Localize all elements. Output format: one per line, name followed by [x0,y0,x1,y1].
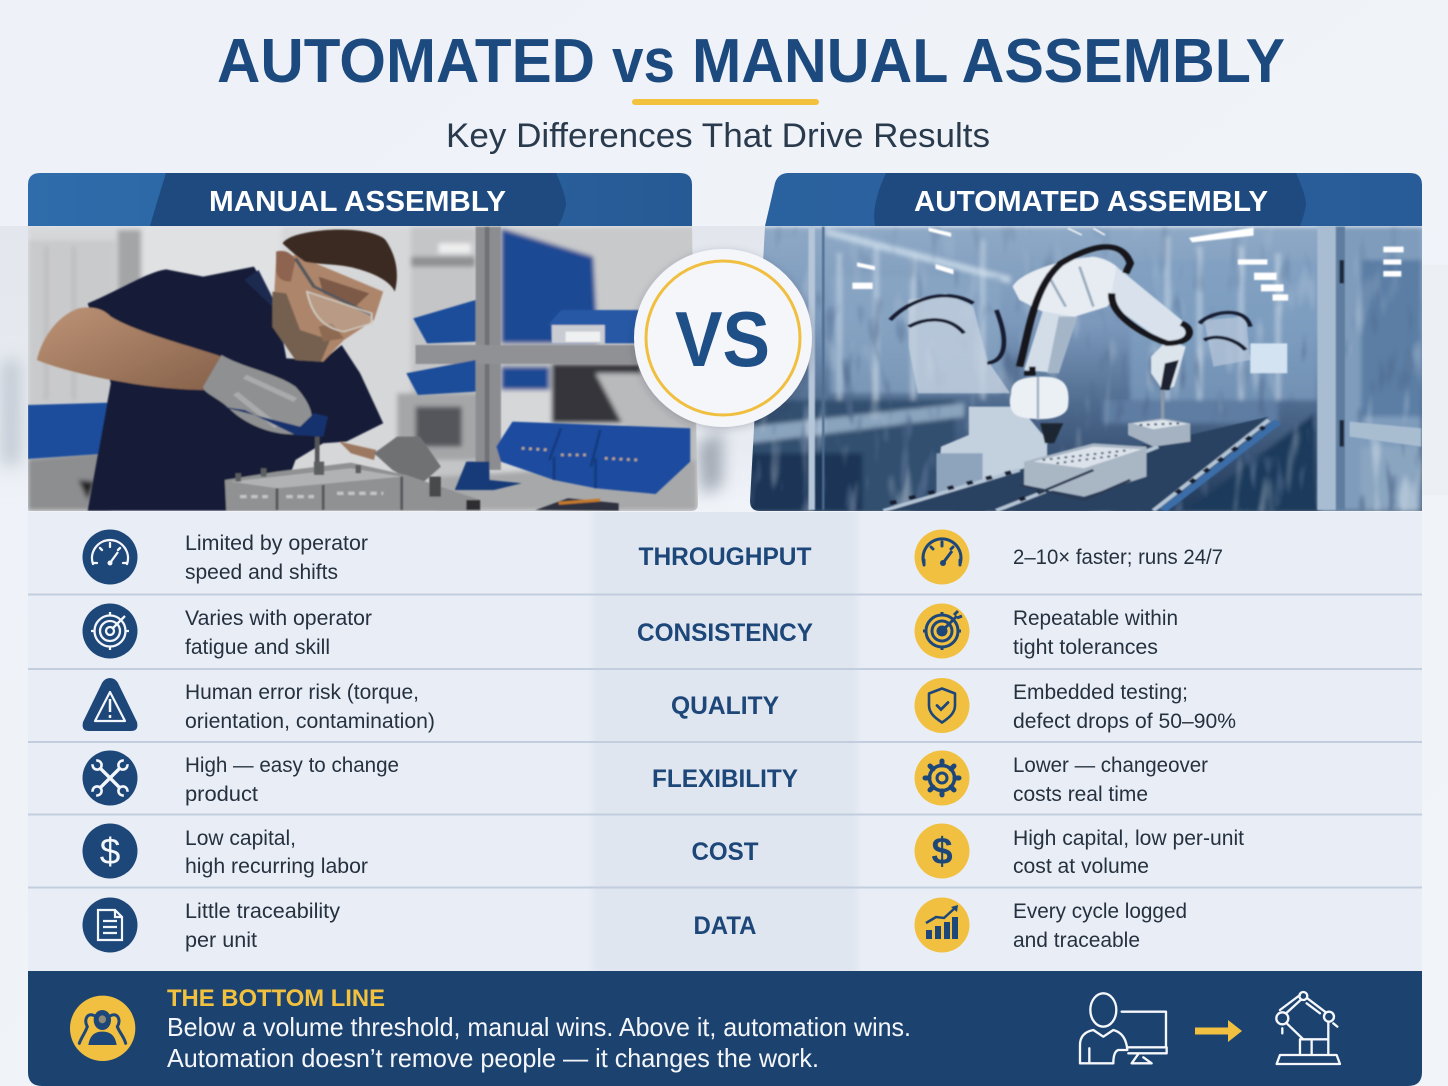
manual header tab [150,173,566,226]
row: flexibility [82,750,1208,806]
head [272,255,383,362]
icon: manual dollar: $ [100,831,120,872]
glove [203,355,312,434]
row: throughput: Limited by operator [185,531,368,555]
conveyor [883,417,1269,511]
row: data [82,898,1187,952]
icon: automated dollar: $ [931,831,953,873]
row: data: Every cycle logged [1013,899,1187,923]
row: throughput: speed and shifts [185,560,338,584]
row: quality: Human error risk (torque, [185,680,419,704]
row: flexibility: FLEXIBILITY [652,765,798,793]
row: consistency: tight tolerances [1013,635,1158,659]
icon: manual warning triangle [83,678,137,731]
background robots [909,293,1010,393]
bottom line heading: THE BOTTOM LINE [167,985,385,1012]
row: quality [83,678,1236,733]
arm cables [1019,247,1189,367]
row: data: and traceable [1013,928,1140,952]
icon: automated bar chart [914,898,970,952]
arm [37,307,222,390]
panel: automated header [765,173,1422,226]
photo: robot arm on automated line [747,226,1426,513]
row: quality: defect drops of 50–90% [1013,709,1236,733]
VS badge [634,249,812,427]
row: cost [82,824,1244,878]
bottom line text: Below a volume threshold, manual wins. Above it, automation wins. [167,1012,911,1042]
frames [805,227,819,510]
title: MANUAL ASSEMBLY [692,27,1285,96]
row: flexibility: Lower — changeover [1013,753,1208,777]
row: throughput [82,530,1223,584]
row: data: per unit [185,928,257,952]
subtitle: Key Differences That Drive Results [446,117,990,155]
row: cost: cost at volume [1013,854,1149,878]
row: throughput: 2–10× faster; runs 24/7 [1013,545,1223,569]
ceiling lights [853,228,1403,300]
robot arm [1024,312,1077,373]
row: consistency: CONSISTENCY [637,619,813,647]
icon: person at computer [1080,993,1167,1063]
icon: robot arm [1276,992,1340,1064]
row: quality: orientation, contamination) [185,709,435,733]
engines [1024,443,1146,497]
title underline [632,99,819,105]
title: AUTOMATED [217,27,595,96]
title [217,27,1285,96]
automated heading: AUTOMATED ASSEMBLY [914,186,1268,218]
icon: manual dollar [82,824,138,878]
row: flexibility: product [185,782,258,806]
row: consistency: Repeatable within [1013,606,1178,630]
background haze behind photos [0,226,1448,501]
row: flexibility: High — easy to change [185,753,399,777]
robot base [940,406,1048,480]
icon: manual gauge [82,530,138,584]
icon: manual target [82,604,138,658]
VS badge: VS [675,295,770,383]
row: quality: QUALITY [671,692,779,720]
row: consistency: fatigue and skill [185,635,330,659]
icon: automated dollar [914,824,970,878]
row: flexibility: costs real time [1013,782,1148,806]
row: throughput: THROUGHPUT [638,543,812,571]
background clutter texture [750,226,1422,511]
row: cost: COST [692,838,758,866]
icon: manual crossed wrenches [82,750,138,806]
shirt [88,267,383,511]
row: cost: High capital, low per-unit [1013,826,1244,850]
row: data: DATA [694,912,756,940]
title: vs [612,27,675,96]
engine block [225,463,480,511]
row: consistency: Varies with operator [185,606,372,630]
icon: manual document [82,898,138,952]
automated header tab [874,173,1306,226]
panel: bottom line: Automation doesn’t remove people — it changes the work. [167,1043,819,1073]
icon: automated target [914,604,970,658]
manual heading: MANUAL ASSEMBLY [209,186,506,218]
photo: worker at manual assembly station [28,227,702,513]
arrow: manual to automated [1195,1020,1242,1042]
row: data: Little traceability [185,899,340,923]
comparison table background [28,512,1422,972]
row: cost: high recurring labor [185,854,368,878]
row: quality: Embedded testing; [1013,680,1188,704]
icon: automated gauge [914,530,970,584]
icon: automated gear [914,750,970,806]
row: consistency [82,604,1178,659]
icon: people [70,996,135,1061]
panel: bottom line [28,971,1422,1086]
icon: automated shield [914,678,970,733]
panel: manual header [28,173,692,226]
row: cost: Low capital, [185,826,296,850]
